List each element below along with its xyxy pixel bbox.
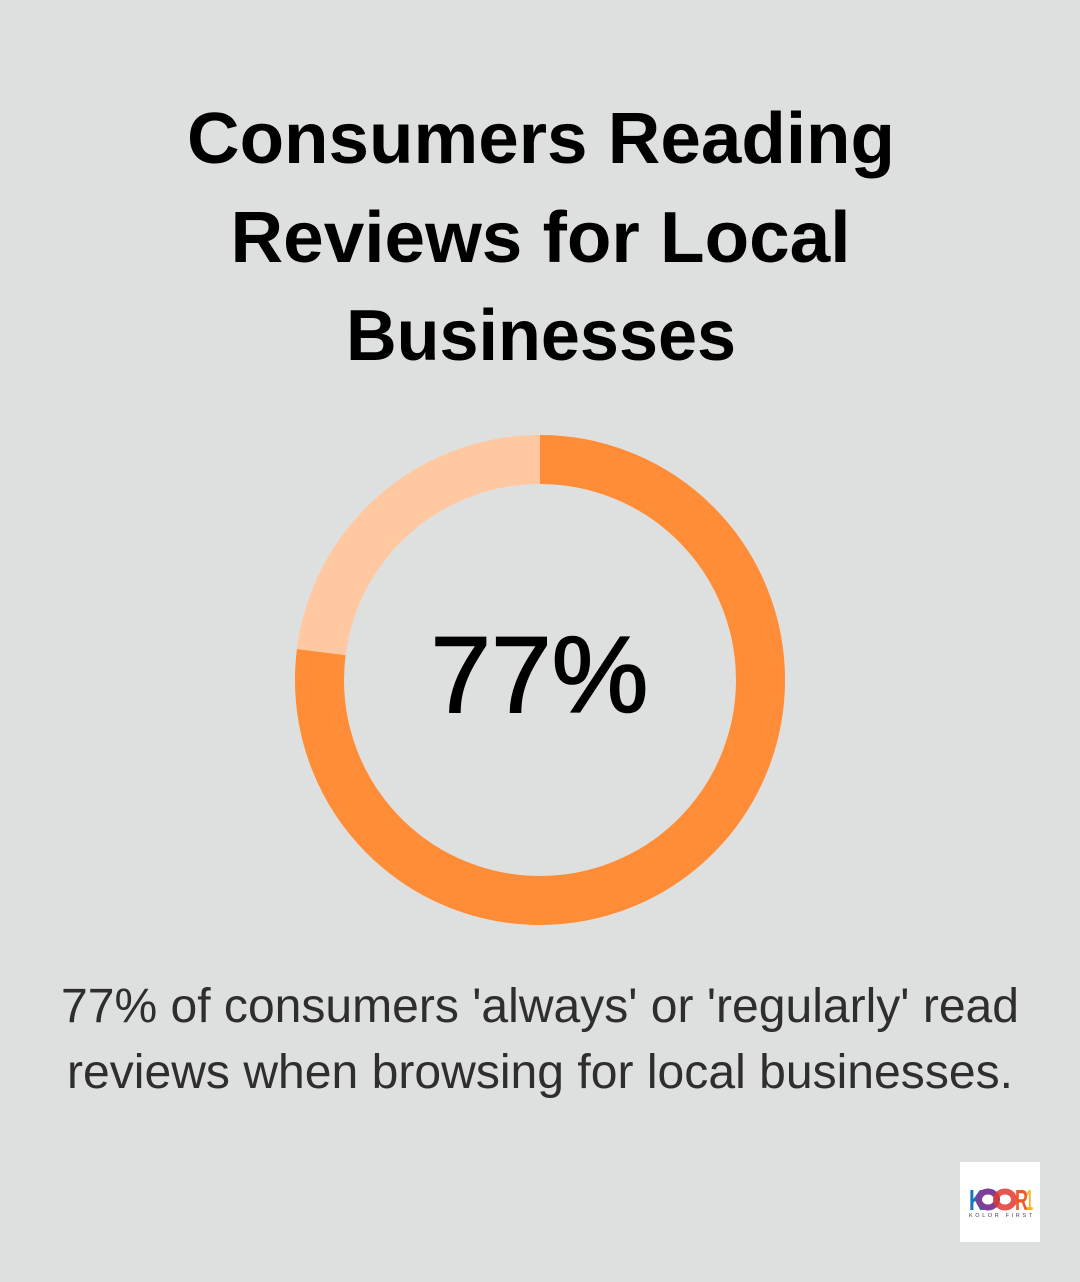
caption: reviews when browsing for local businesses. — [67, 1046, 1013, 1099]
title: Reviews for Local — [230, 198, 851, 278]
logo: Koori Kolor First — [960, 1162, 1040, 1242]
caption: 77% of consumers 'always' or 'regularly' read — [61, 980, 1019, 1033]
donut chart: 77 percent — [320, 460, 760, 900]
title: Consumers Reading — [187, 99, 895, 179]
center value: 77% — [430, 614, 648, 736]
title: Businesses — [346, 296, 736, 376]
logo: Koori Kolor First: 1 — [1026, 1185, 1033, 1217]
caption — [61, 980, 1019, 1099]
logo: Koori Kolor First: K — [969, 1185, 984, 1217]
title — [187, 99, 895, 376]
logo: Koori Kolor First: R — [1015, 1185, 1028, 1217]
logo: Koori Kolor First: KOLOR FIRST — [969, 1213, 1033, 1219]
